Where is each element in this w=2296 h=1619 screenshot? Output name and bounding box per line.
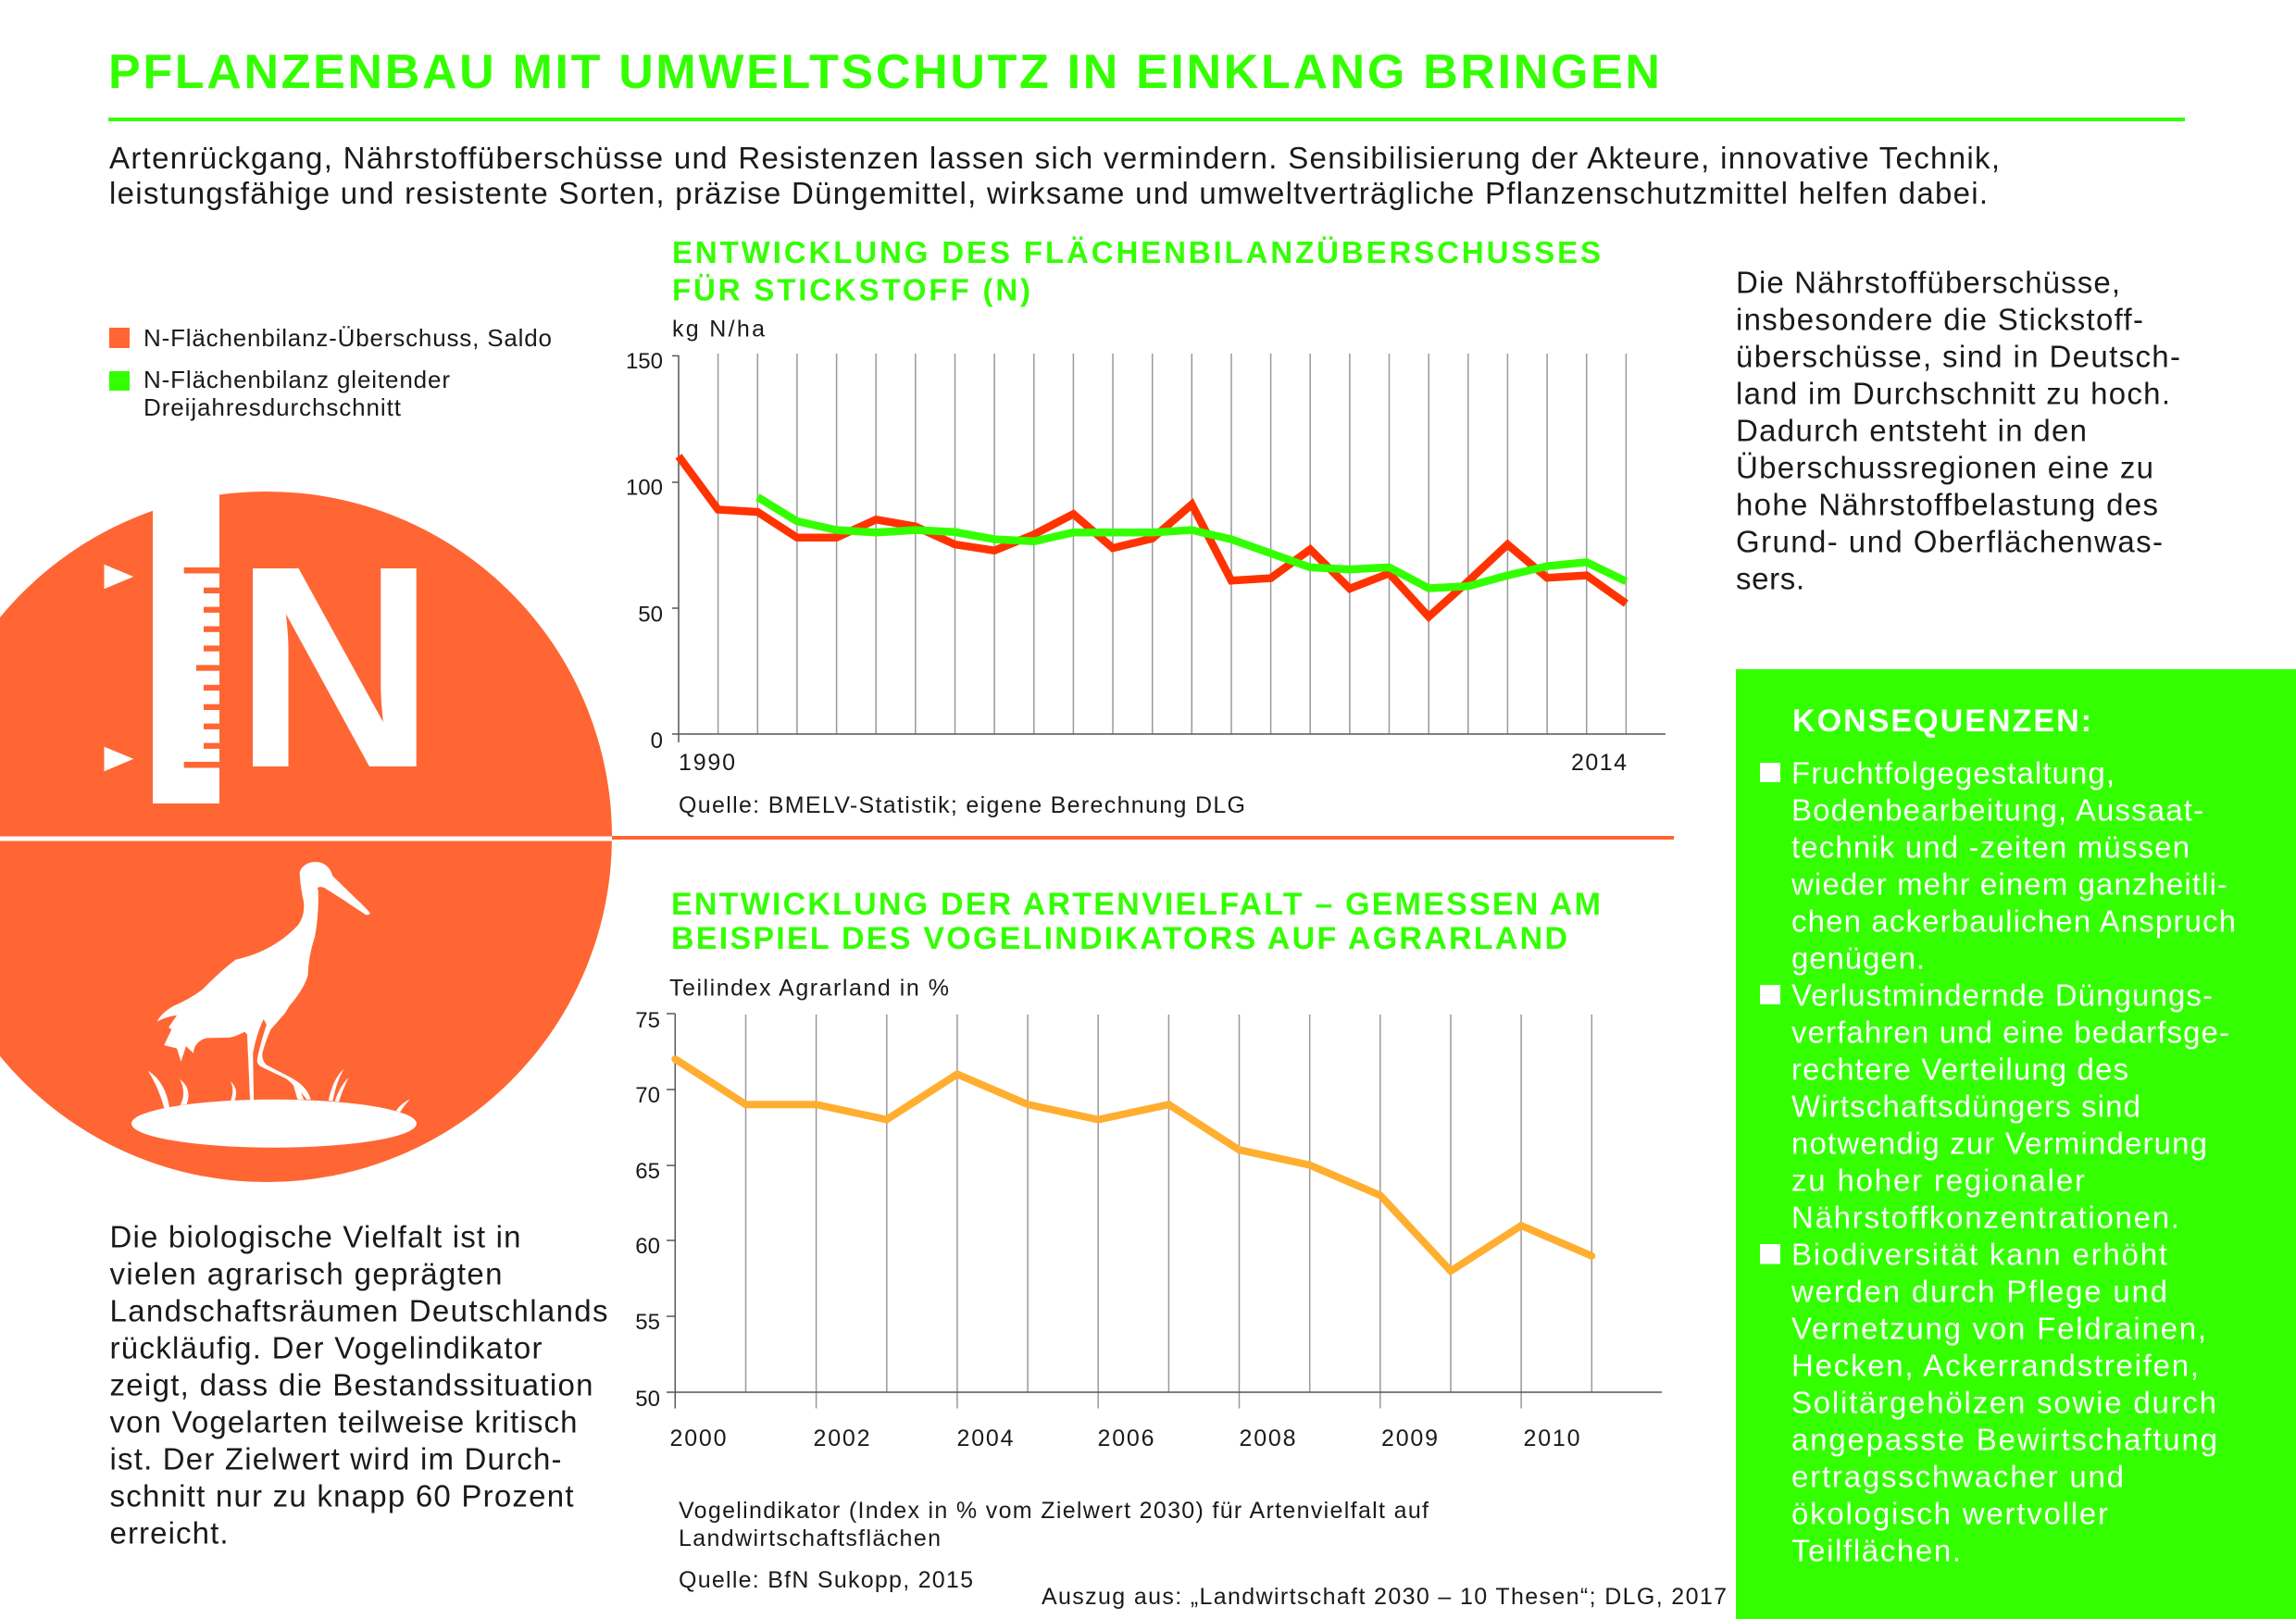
y axis labels (626, 349, 663, 753)
intro text: leistungsfähige und resistente Sorten, präzise Düngemittel, wirksame und umweltverträgliche Pflanzenschutzmittel helfen dabei. (109, 176, 1988, 210)
heading: biodiversity chart: ENTWICKLUNG DER ARTENVIELFALT – GEMESSEN AM (671, 887, 1601, 922)
consequence 3: Vernetzung von Feldrainen, (1791, 1312, 2206, 1346)
y axis unit: Teilindex Agrarland in % (669, 976, 949, 1002)
consequence 2: verfahren und eine bedarfsge- (1791, 1015, 2229, 1050)
source: Quelle: BfN Sukopp, 2015 (679, 1567, 973, 1593)
consequence 2: Wirtschaftsdüngers sind (1791, 1090, 2140, 1124)
orange series: bird indicator (675, 1059, 1591, 1271)
x axis labels: 2010 (1524, 1426, 1579, 1451)
text block: nutrient surplus: überschüsse, sind in Deutsch- (1736, 340, 2180, 374)
y axis labels: 50 (638, 602, 663, 628)
x axis labels: 2000 (670, 1426, 726, 1451)
text block: nutrient surplus: Die Nährstoffüberschüsse, (1736, 266, 2120, 300)
legend swatch: saldo (109, 328, 130, 348)
x axis labels (670, 1426, 1579, 1451)
heading: nitrogen chart: FÜR STICKSTOFF (N) (672, 272, 1030, 307)
excerpt credit: Auszug aus: „Landwirtschaft 2030 – 10 Thesen“; DLG, 2017 (1042, 1584, 1727, 1610)
consequence 1: chen ackerbaulichen Anspruch (1791, 904, 2236, 939)
x axis labels: 1990 (679, 750, 735, 776)
consequence 2: Nährstoffkonzentrationen. (1791, 1201, 2179, 1235)
heading: biodiversity chart (671, 887, 1601, 956)
green series: three-year average (757, 497, 1626, 589)
consequence 1: technik und -zeiten müssen (1791, 830, 2190, 865)
legend swatch: moving average (109, 371, 130, 391)
text block: biodiversity (109, 1220, 607, 1551)
icon: stork (131, 862, 417, 1148)
consequence 1: wieder mehr einem ganzheitli- (1791, 867, 2227, 902)
y axis labels: 55 (635, 1310, 660, 1335)
legend: N-Flächenbilanz gleitender (144, 366, 450, 393)
text block: biodiversity: ist. Der Zielwert wird im Durch- (109, 1442, 561, 1476)
x axis labels: 2004 (957, 1426, 1014, 1451)
text block: biodiversity: rückläufig. Der Vogelindikator (109, 1331, 543, 1365)
consequence 2: rechtere Verteilung des (1791, 1052, 2128, 1087)
red series: saldo (679, 456, 1626, 616)
consequence 1 (1760, 756, 2236, 976)
text block: biodiversity: von Vogelarten teilweise kritisch (109, 1405, 578, 1439)
x axis labels: 2009 (1381, 1426, 1438, 1451)
text block: nutrient surplus: insbesondere die Stickstoff- (1736, 303, 2143, 337)
consequence 2 (1760, 978, 2229, 1235)
consequence 3: Teilflächen. (1791, 1534, 1961, 1568)
intro text: Artenrückgang, Nährstoffüberschüsse und Resistenzen lassen sich vermindern. Sensibilisierung der Akteure, innovative Technik, (109, 141, 2000, 175)
line chart: bird indicator (635, 976, 1662, 1593)
consequence 3: Solitärgehölzen sowie durch (1791, 1386, 2216, 1420)
x axis labels: 2002 (813, 1426, 870, 1451)
consequence 3 (1760, 1238, 2217, 1568)
y axis labels: 100 (626, 476, 663, 500)
consequence 3: Biodiversität kann erhöht (1791, 1238, 2167, 1272)
consequence 2: zu hoher regionaler (1791, 1164, 2085, 1198)
chart note: Vogelindikator (Index in % vom Zielwert 2030) für Artenvielfalt auf (679, 1498, 1429, 1524)
y axis labels: 50 (635, 1387, 660, 1412)
text block: biodiversity: zeigt, dass die Bestandssituation (109, 1368, 593, 1402)
text block: biodiversity: Landschaftsräumen Deutschlands (109, 1294, 607, 1328)
y axis labels: 70 (635, 1083, 660, 1108)
text block: nutrient surplus: Überschussregionen eine zu (1736, 451, 2153, 485)
y axis labels: 0 (651, 729, 663, 753)
legend: Dreijahresdurchschnitt (144, 393, 402, 421)
y axis labels: 60 (635, 1234, 660, 1259)
x axis labels: 2014 (1571, 750, 1627, 776)
consequence 2: notwendig zur Verminderung (1791, 1127, 2207, 1161)
consequence 1: Bodenbearbeitung, Aussaat- (1791, 793, 2203, 828)
text block: biodiversity: vielen agrarisch geprägten (109, 1257, 502, 1291)
consequence 3: angepasste Bewirtschaftung (1791, 1423, 2217, 1457)
consequence 3: Hecken, Ackerrandstreifen, (1791, 1349, 2199, 1383)
y axis labels (635, 1008, 660, 1412)
y axis labels: 150 (626, 349, 663, 374)
y axis unit: kg N/ha (672, 317, 765, 342)
panel: consequences (1736, 669, 2296, 1619)
text block: nutrient surplus: hohe Nährstoffbelastung des (1736, 488, 2158, 522)
consequence 1: genügen. (1791, 941, 1925, 976)
text block: nutrient surplus: sers. (1736, 562, 1804, 596)
heading: nitrogen chart (672, 235, 1601, 307)
title rule (108, 118, 2185, 121)
text block: biodiversity: erreicht. (109, 1516, 228, 1551)
text block: biodiversity: schnitt nur zu knapp 60 Prozent (109, 1479, 574, 1513)
x axis labels (679, 750, 1627, 776)
consequence 3: werden durch Pflege und (1791, 1275, 2167, 1309)
icon: letter N: N (234, 505, 435, 828)
y axis labels: 75 (635, 1008, 660, 1033)
legend: N-Flächenbilanz-Überschuss, Saldo (144, 324, 552, 352)
orange divider (612, 836, 1674, 840)
text block: nutrient surplus: land im Durchschnitt zu hoch. (1736, 377, 2170, 411)
source: Quelle: BMELV-Statistik; eigene Berechnung DLG (679, 792, 1245, 818)
y axis labels: 65 (635, 1159, 660, 1184)
icon: ruler (104, 486, 219, 803)
consequence 3: ertragsschwacher und (1791, 1460, 2124, 1494)
divider across circle (0, 837, 613, 841)
circle illustration (0, 486, 613, 1182)
chart note: Landwirtschaftsflächen (679, 1526, 941, 1551)
title: PFLANZENBAU MIT UMWELTSCHUTZ IN EINKLANG BRINGEN (108, 45, 1660, 99)
x axis labels: 2006 (1098, 1426, 1154, 1451)
text block: nutrient surplus (1736, 266, 2180, 596)
heading: biodiversity chart: BEISPIEL DES VOGELINDIKATORS AUF AGRARLAND (671, 921, 1567, 956)
consequence 3: ökologisch wertvoller (1791, 1497, 2108, 1531)
line chart: nitrogen balance (626, 317, 1666, 818)
legend (109, 324, 552, 421)
consequence 1: Fruchtfolgegestaltung, (1791, 756, 2115, 791)
heading: nitrogen chart: ENTWICKLUNG DES FLÄCHENBILANZÜBERSCHUSSES (672, 235, 1601, 269)
intro text (109, 141, 2000, 210)
consequence 2: Verlustmindernde Düngungs- (1791, 978, 2213, 1013)
text block: nutrient surplus: Grund- und Oberflächenwas- (1736, 525, 2163, 559)
text block: biodiversity: Die biologische Vielfalt ist in (109, 1220, 520, 1254)
x axis labels: 2008 (1239, 1426, 1296, 1451)
chart note (679, 1498, 1429, 1551)
text block: nutrient surplus: Dadurch entsteht in den (1736, 414, 2087, 448)
panel heading: KONSEQUENZEN: (1792, 704, 2091, 739)
